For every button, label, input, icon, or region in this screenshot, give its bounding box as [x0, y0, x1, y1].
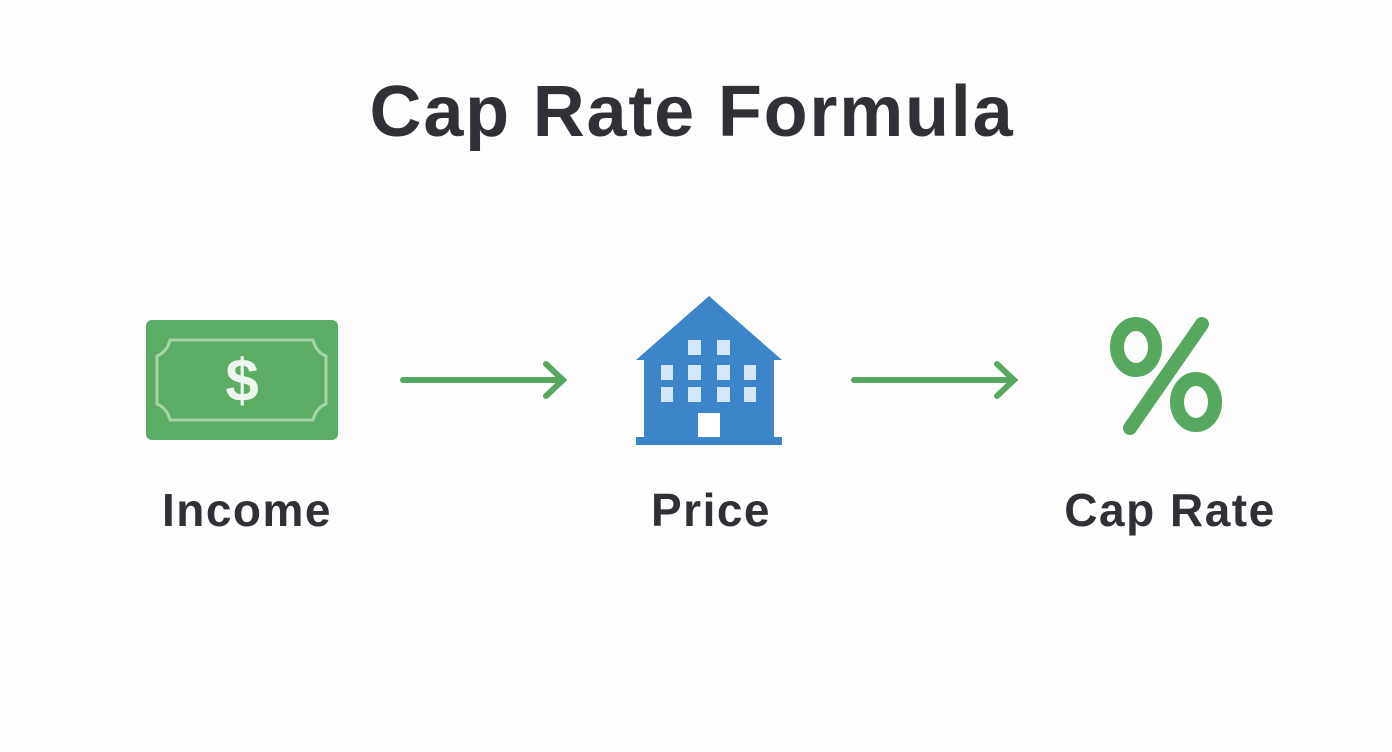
- icon: percent: [1117, 324, 1215, 428]
- title: Cap Rate Formula: [370, 72, 1014, 152]
- label: cap rate: Cap Rate: [1064, 484, 1276, 536]
- icon: money bill: [146, 320, 338, 440]
- icon: money bill: $: [225, 347, 259, 414]
- icon: building: [636, 296, 782, 445]
- label: income: Income: [162, 484, 332, 536]
- label: price: Price: [651, 484, 771, 536]
- arrow 2: [854, 364, 1014, 396]
- arrow 1: [403, 364, 563, 396]
